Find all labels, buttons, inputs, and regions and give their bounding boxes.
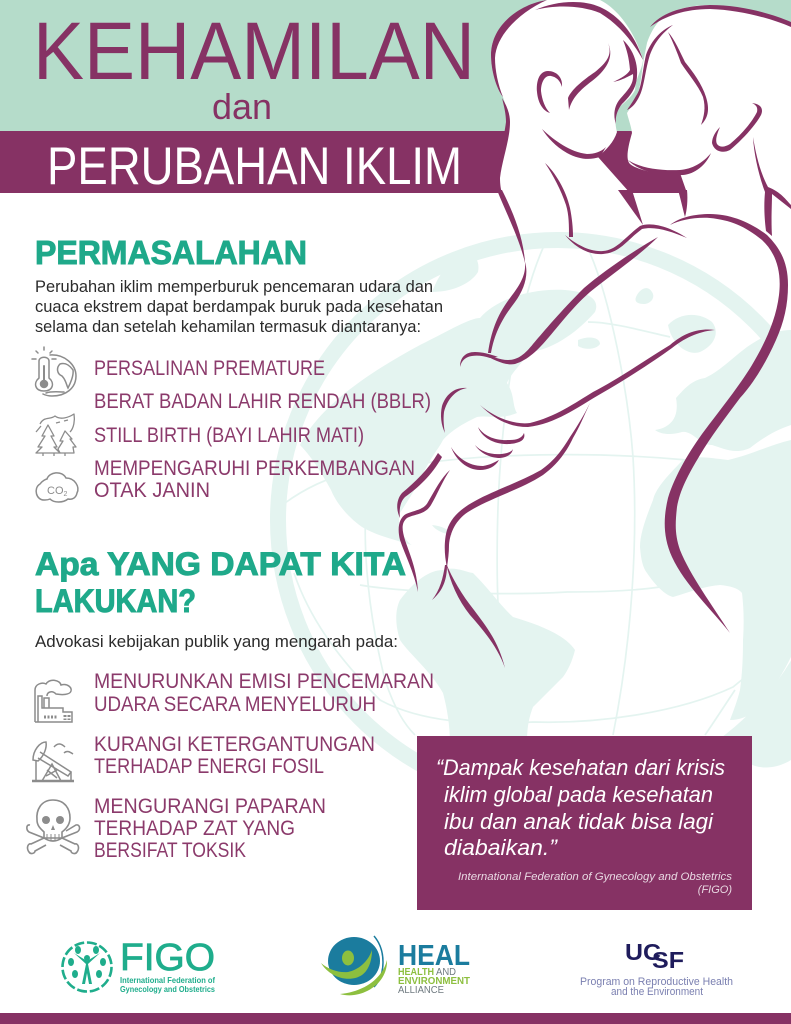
neck wedge (678, 190, 687, 217)
FIGO name: International Federation of (120, 975, 215, 985)
globe illustration (278, 240, 791, 800)
icon: CO2 cloud: CO (47, 485, 64, 497)
mother chin (628, 153, 711, 175)
intro text (35, 277, 443, 336)
header green background (0, 0, 791, 131)
intro text: Perubahan iklim memperburuk pencemaran udara dan (35, 277, 433, 296)
icon: HEAL emblem (321, 936, 387, 995)
hip contour (446, 563, 505, 668)
header purple band (0, 131, 791, 193)
quote text (436, 755, 725, 860)
item: KURANGI KETERGANTUNGAN (94, 732, 375, 756)
quote text: iklim global pada kesehatan (444, 782, 713, 807)
title connector: dan (212, 86, 272, 127)
intro text: selama dan setelah kehamilan termasuk diantaranya: (35, 317, 421, 336)
item: MEMPENGARUHI PERKEMBANGAN (94, 456, 415, 480)
HEAL name: AND (436, 967, 456, 978)
HEAL wordmark: HEAL (398, 940, 470, 972)
mother head top outline (650, 5, 791, 27)
child jaw to arm line (545, 163, 573, 237)
forearm inner (399, 470, 450, 592)
item: TERHADAP ZAT YANG (94, 816, 295, 840)
child chin (542, 129, 606, 159)
heading line two: LAKUKAN? (35, 583, 196, 619)
icon: FIGO emblem (62, 942, 112, 992)
mother forehead (627, 25, 673, 110)
child arm contour (565, 224, 687, 254)
mother hair strand (753, 137, 791, 236)
item: BERAT BADAN LAHIR RENDAH (BBLR) (94, 389, 431, 413)
icon: skull and crossbones (27, 800, 80, 854)
item: TERHADAP ENERGI FOSIL (94, 754, 324, 778)
intro text: Advokasi kebijakan publik yang mengarah pada: (35, 632, 398, 651)
quote text: ibu dan anak tidak bisa lagi (444, 809, 714, 834)
quote attribution: (FIGO) (698, 884, 732, 896)
child head outline (491, 0, 547, 97)
thumb line (441, 388, 467, 433)
logo: HEAL (321, 936, 470, 996)
HEAL name: HEALTH (398, 967, 434, 978)
icon: CO2 cloud: 2 (64, 491, 68, 498)
subtitle: PERUBAHAN IKLIM (47, 137, 462, 196)
item: BERSIFAT TOKSIK (94, 838, 247, 862)
mother and child line illustration (397, 0, 791, 668)
footer bar (0, 1013, 791, 1024)
child ear (537, 71, 562, 113)
child hand hook (460, 352, 498, 367)
program name: Program on Reproductive Health (580, 976, 733, 988)
logo: FIGO (62, 937, 215, 994)
mother silhouette fill (627, 5, 791, 193)
panel: what we can do (27, 546, 434, 862)
item: MENGURANGI PAPARAN (94, 794, 326, 818)
icon: CO2 cloud (36, 473, 78, 502)
icon: forest fire (36, 414, 76, 456)
heading: Apa YANG DAPAT KITA (35, 546, 406, 582)
heading: PERMASALAHAN (35, 234, 307, 271)
HEAL name: ENVIRONMENT (398, 976, 470, 987)
item: STILL BIRTH (BAYI LAHIR MATI) (94, 423, 364, 447)
HEAL name: ALLIANCE (398, 985, 444, 996)
band wedge by child arm (618, 190, 643, 225)
quote attribution (458, 871, 733, 896)
program name (580, 976, 733, 998)
intro text: cuaca ekstrem dapat berdampak buruk pada kesehatan (35, 297, 443, 316)
logo: UCSF (580, 939, 733, 998)
mother arm (480, 330, 715, 427)
forearm outer (397, 453, 442, 518)
panel: permasalahan (32, 234, 443, 502)
icon: factory (35, 680, 72, 722)
quote text: “Dampak kesehatan dari krisis (436, 755, 725, 780)
mother belly contour (445, 403, 590, 567)
FIGO wordmark: FIGO (120, 937, 215, 979)
logo: UCSF: SF (652, 947, 684, 973)
child arm lower edge (482, 237, 658, 364)
callout: quote box (417, 736, 752, 910)
mother shoulder and back (665, 214, 788, 633)
mother ear (712, 103, 762, 152)
UCSF wordmark: UC (625, 939, 661, 965)
FIGO name (120, 975, 215, 994)
title: KEHAMILAN (33, 6, 475, 97)
item: MENURUNKAN EMISI PENCEMARAN (94, 669, 434, 693)
item: PERSALINAN PREMATURE (94, 356, 325, 380)
finger lines (478, 427, 524, 444)
child neck and left contour (497, 98, 510, 193)
icon: oil pump (32, 742, 74, 781)
FIGO name: Gynecology and Obstetrics (120, 984, 215, 994)
child hair curl (568, 43, 610, 110)
item: OTAK JANIN (94, 478, 210, 502)
icon: thermometer and globe (32, 347, 76, 396)
quote text: diabaikan.” (444, 835, 559, 860)
mother hair line (668, 32, 708, 125)
program name: and the Environment (611, 986, 703, 998)
quote attribution: International Federation of Gynecology and Obstetrics (458, 871, 733, 883)
child silhouette fill (491, 0, 643, 193)
HEAL name (398, 967, 470, 996)
item: UDARA SECARA MENYELURUH (94, 692, 376, 716)
